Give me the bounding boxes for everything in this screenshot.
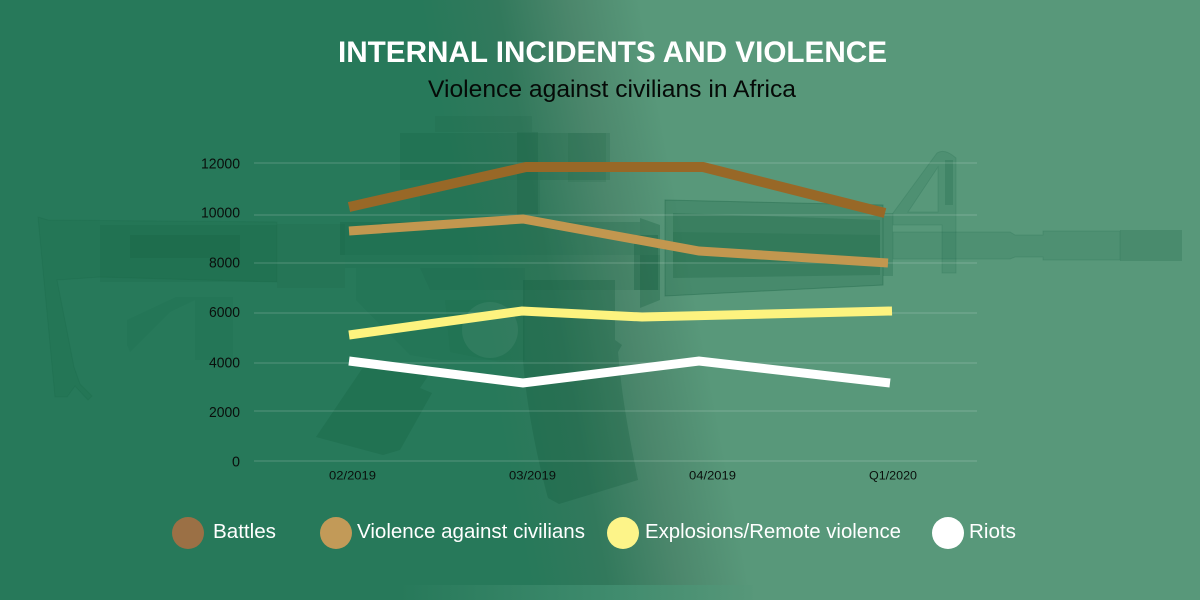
y axis labels: 12000 bbox=[201, 156, 240, 172]
rifle scope bbox=[400, 133, 610, 180]
legend item: riots bbox=[932, 517, 1016, 549]
y axis labels: 8000 bbox=[209, 254, 240, 272]
line chart bbox=[201, 156, 977, 482]
subtitle: Violence against civilians in Africa bbox=[428, 76, 797, 103]
rifle trigger guard bbox=[445, 300, 524, 362]
rifle barrel bbox=[893, 231, 1120, 260]
x axis labels: 02/2019 bbox=[329, 468, 376, 482]
rifle buffer tube bbox=[100, 225, 277, 282]
rifle receiver bbox=[340, 222, 640, 255]
legend item: violence against civilians: Violence against civilians bbox=[357, 521, 585, 543]
series: riots bbox=[349, 361, 890, 383]
rifle flash hider bbox=[1120, 230, 1182, 261]
legend bbox=[172, 517, 1016, 549]
rifle silhouette bbox=[38, 116, 1182, 504]
legend item: explosions and remote violence bbox=[607, 517, 901, 549]
series: battles bbox=[349, 167, 885, 213]
title: INTERNAL INCIDENTS AND VIOLENCE bbox=[338, 36, 887, 69]
rifle delta ring bbox=[640, 218, 660, 308]
rifle front sight bbox=[893, 151, 956, 273]
x axis labels: 03/2019 bbox=[509, 468, 556, 482]
y axis labels: 0 bbox=[232, 454, 240, 470]
series: violence against civilians bbox=[349, 219, 888, 263]
rifle lower grip plate bbox=[127, 297, 233, 360]
rifle gas block bbox=[883, 213, 893, 276]
x axis labels: Q1/2020 bbox=[869, 468, 917, 482]
gridlines bbox=[254, 163, 977, 461]
legend item: violence against civilians bbox=[320, 517, 585, 549]
series: explosions and remote violence bbox=[349, 311, 892, 335]
legend item: riots: Riots bbox=[969, 521, 1016, 543]
rifle magazine bbox=[523, 280, 638, 504]
x axis labels: 04/2019 bbox=[689, 468, 736, 482]
legend item: battles bbox=[172, 517, 276, 549]
legend item: battles: Battles bbox=[213, 521, 276, 543]
y axis labels: 2000 bbox=[209, 404, 240, 421]
y axis labels: 6000 bbox=[209, 304, 240, 321]
y axis labels: 4000 bbox=[209, 354, 240, 372]
rifle handguard bbox=[665, 200, 883, 296]
rifle pistol grip bbox=[316, 360, 432, 455]
rifle stock bbox=[38, 217, 277, 400]
y axis labels bbox=[201, 156, 240, 470]
legend item: explosions and remote violence: Explosions/Remote violence bbox=[645, 521, 901, 543]
x axis labels bbox=[329, 468, 917, 482]
y axis labels: 10000 bbox=[201, 204, 240, 222]
